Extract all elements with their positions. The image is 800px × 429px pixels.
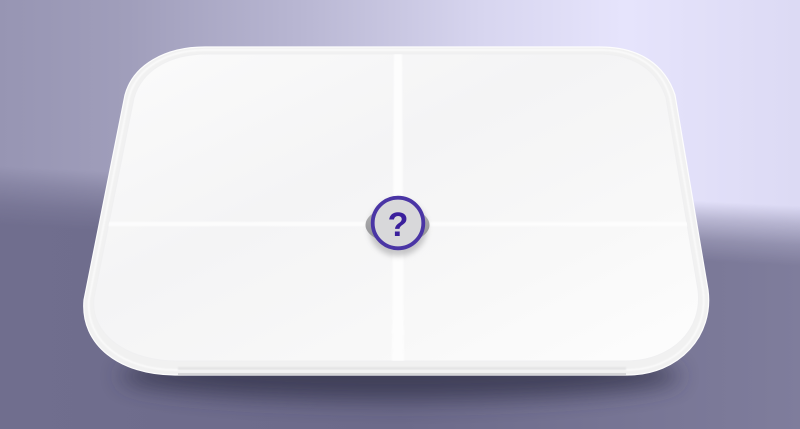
- badge side tabs: [366, 207, 430, 243]
- bottom edge line: [178, 373, 626, 375]
- rim highlight: [89, 50, 704, 370]
- vertical divider: [394, 110, 402, 190]
- question mark: ?: [388, 206, 408, 244]
- question mark badge: [366, 198, 430, 256]
- scale body: [84, 47, 709, 375]
- top surface: [94, 54, 699, 361]
- lower glass bevel: [178, 367, 626, 370]
- floor shadow under scale: [120, 352, 680, 400]
- dividers: [108, 110, 687, 250]
- glass outer edge: [84, 47, 709, 375]
- horizontal divider: [108, 222, 687, 226]
